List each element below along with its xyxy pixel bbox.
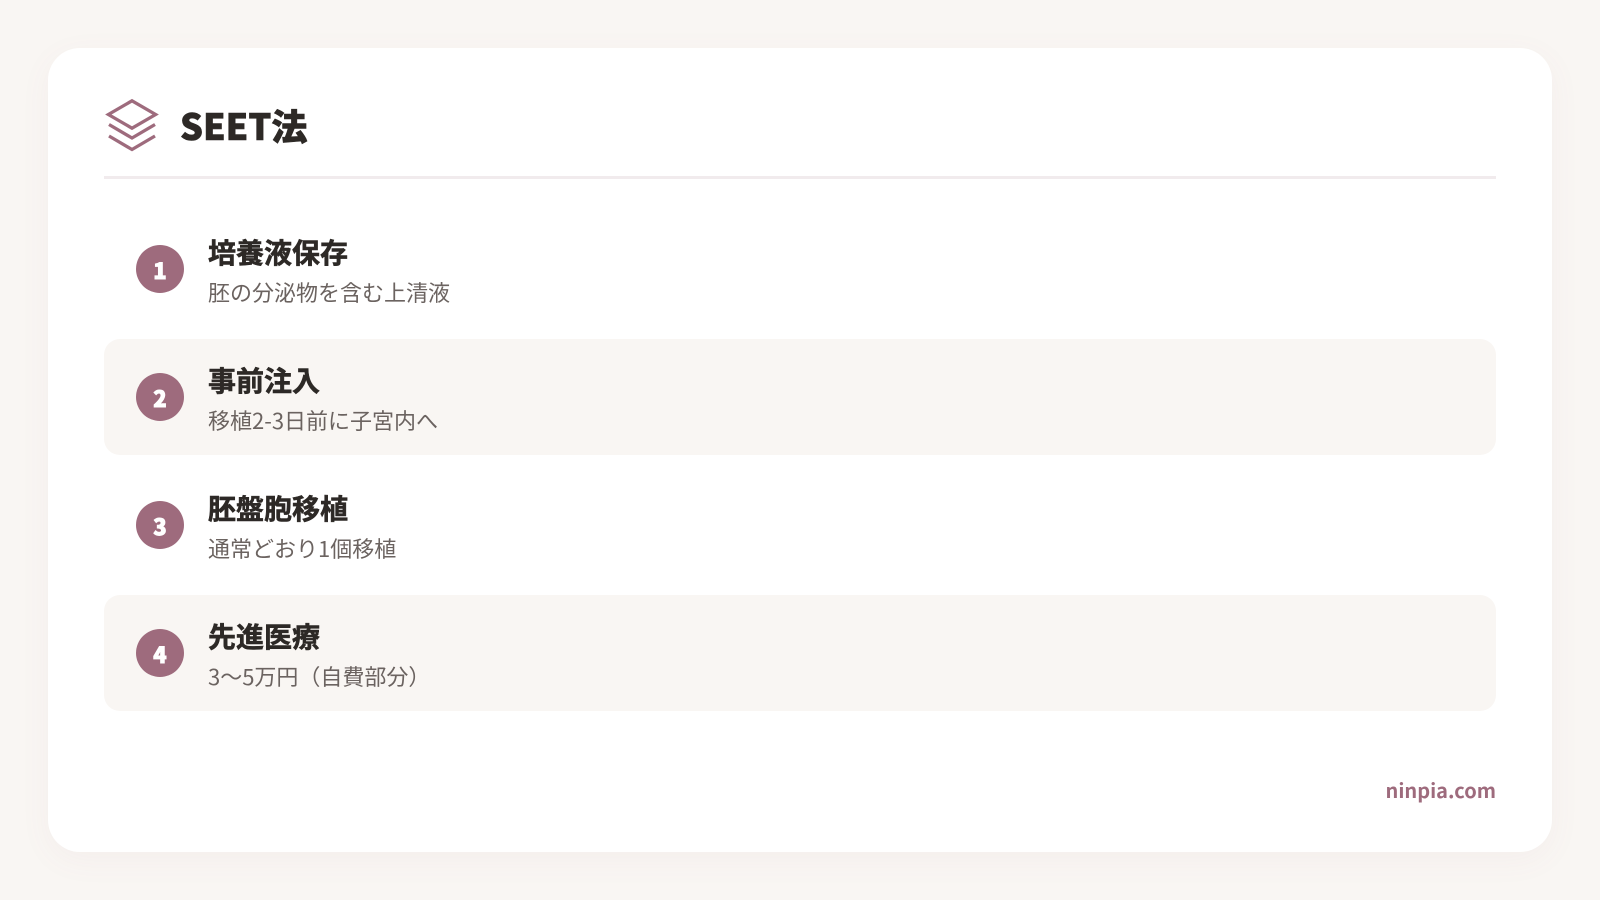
step 1 — [136, 232, 450, 308]
step 2 heading: 事前注入 — [208, 360, 320, 400]
step 1 description: 胚の分泌物を含む上清液 — [208, 276, 450, 308]
step 2 number: 2 — [153, 382, 167, 414]
step 3 number: 3 — [153, 510, 167, 542]
step 4 — [104, 595, 1496, 711]
step 4 number: 4 — [153, 638, 167, 670]
step 2 — [104, 339, 1496, 455]
title: SEET法 — [180, 99, 307, 151]
step 1 number: 1 — [153, 254, 167, 286]
step 2 description: 移植2-3日前に子宮内へ — [208, 404, 438, 436]
step 3 description: 通常どおり1個移植 — [208, 532, 396, 564]
step 4 heading: 先進医療 — [208, 616, 320, 656]
step 1 heading: 培養液保存 — [208, 232, 348, 272]
step 4 description: 3〜5万円（自費部分） — [208, 660, 430, 692]
step 3 heading: 胚盤胞移植 — [208, 488, 348, 528]
icon: stacked layers — [105, 99, 159, 152]
footer: site name: ninpia.com — [1386, 775, 1496, 804]
step 3 — [136, 488, 396, 564]
